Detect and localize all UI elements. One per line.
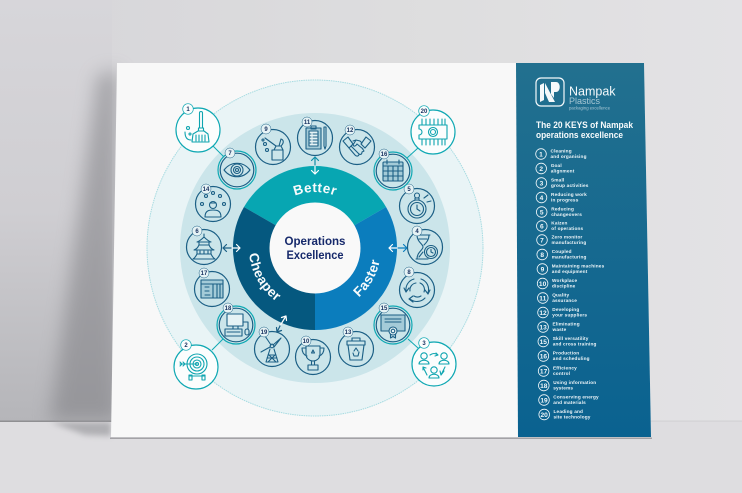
- key list: in progress: [551, 198, 579, 202]
- key 20: microchip: [411, 106, 455, 154]
- key 18: computer: 18: [225, 306, 232, 312]
- key list: Cleaning: [550, 148, 572, 154]
- key 10: trophy: [296, 336, 330, 374]
- key 12: handshake: 12: [347, 128, 354, 134]
- key list: 9: [541, 266, 545, 273]
- key list: Skill versatility: [553, 336, 589, 341]
- key 15: certificate: 15: [381, 306, 388, 312]
- key 5: stopwatch: 5: [407, 187, 411, 193]
- centre disc: [270, 202, 360, 294]
- key list: your suppliers: [552, 312, 587, 318]
- key 9: oil can: [256, 124, 290, 164]
- key list: group activities: [551, 183, 589, 188]
- key list: 3: [540, 180, 544, 187]
- key 17: control board: 17: [201, 271, 208, 277]
- key list: Small: [551, 178, 564, 182]
- connector lines to highlighted keys: [212, 146, 418, 350]
- key 3: group activities: [412, 338, 456, 386]
- key list: 12: [539, 310, 547, 317]
- label: Faster: Faster: [352, 260, 380, 297]
- key 10: trophy: 10: [303, 339, 310, 345]
- key list: 18: [540, 383, 548, 390]
- key 8: cycle arrows: [400, 267, 434, 308]
- key list: discipline: [552, 284, 576, 288]
- key 8: cycle arrows: 8: [407, 270, 411, 276]
- key 15: certificate: [374, 303, 412, 344]
- key list: 15: [540, 339, 547, 346]
- centre title: Operations: [284, 234, 346, 248]
- key list: 7: [540, 237, 544, 244]
- key 11: clipboard: 11: [304, 120, 311, 126]
- key list: site technology: [554, 414, 591, 420]
- key list: manufacturing: [552, 240, 586, 245]
- key 7: eye: 7: [228, 151, 232, 157]
- key list: control: [553, 371, 570, 376]
- key 17: control board: [194, 268, 230, 306]
- key 1: broom: [176, 104, 220, 152]
- key list: Reducing work: [551, 192, 587, 197]
- key list: 16: [540, 353, 547, 360]
- key 12: handshake: [340, 125, 374, 164]
- key list: and equipment: [552, 269, 588, 274]
- key list: Maintaining machines: [552, 264, 605, 268]
- logo: Nampak Plastics: Nampak: [569, 84, 616, 98]
- key list: manufacturing: [552, 254, 587, 260]
- segment: cheaper: [233, 207, 315, 330]
- key list: 1: [539, 151, 543, 158]
- heading: The 20 KEYS of Nampak: [536, 120, 634, 130]
- key 1: broom: 1: [186, 107, 190, 113]
- key list: alignment: [551, 168, 575, 174]
- key 14: person with network: [196, 184, 230, 222]
- diagram: concentric background circles: [147, 80, 483, 416]
- key list: 11: [539, 295, 547, 302]
- logo: Nampak Plastics: Plastics: [569, 96, 601, 106]
- key list: Developing: [552, 307, 579, 312]
- key list: and materials: [553, 400, 586, 405]
- key list: Production: [553, 350, 579, 356]
- key list: 6: [540, 223, 544, 230]
- key 6: pagoda: [186, 226, 222, 264]
- key list: 17: [540, 368, 548, 375]
- key 13: recycling bin: 13: [345, 330, 352, 336]
- key list: Eliminating: [552, 322, 580, 326]
- poster sheet: [110, 63, 652, 439]
- key list: Efficiency: [553, 366, 577, 370]
- segmented wheel: [233, 166, 397, 330]
- key list: Workplace: [552, 278, 577, 283]
- key list: assurance: [552, 298, 577, 303]
- key 4: hourglass: [408, 226, 442, 264]
- key list: and scheduling: [553, 356, 590, 361]
- key list: and organising: [550, 154, 587, 159]
- key list: of operations: [551, 226, 584, 231]
- key 7: eye: [218, 148, 256, 189]
- key list: 4: [540, 195, 544, 202]
- key list: Coupled: [552, 249, 572, 254]
- key list: 5: [540, 209, 544, 216]
- key list: systems: [553, 386, 573, 390]
- key list: 13: [539, 324, 547, 331]
- key 20: microchip: 20: [421, 109, 428, 115]
- key list: and cross training: [553, 342, 597, 346]
- key list: 8: [540, 252, 544, 259]
- key 5: stopwatch: [400, 184, 434, 224]
- key list: Conserving energy: [553, 394, 599, 400]
- centre title: Excellence: [286, 248, 344, 262]
- key list: Leading and: [554, 409, 583, 414]
- key list: 10: [539, 281, 547, 288]
- key 18: computer: [217, 303, 255, 344]
- key 6: pagoda: 6: [195, 229, 199, 235]
- heading: [536, 120, 634, 140]
- key 4: hourglass: 4: [415, 229, 419, 235]
- key list: changeovers: [551, 212, 582, 217]
- logo: Nampak Plastics: packaging excellence: [569, 106, 611, 110]
- key list: Using information: [553, 380, 596, 385]
- key 13: recycling bin: [338, 327, 374, 366]
- key list: 2: [539, 166, 543, 173]
- key 16: calendar: 16: [381, 152, 388, 158]
- key list: Kaizen: [551, 220, 568, 226]
- key list: Zero monitor: [552, 234, 583, 240]
- panel: key list sidebar: [516, 63, 651, 437]
- segment: better: [244, 166, 386, 248]
- heading: operations excellence: [536, 130, 623, 140]
- centre title: [284, 234, 346, 262]
- key 2: target: [174, 340, 218, 389]
- key 9: oil can: 9: [264, 127, 268, 133]
- key list: 20: [541, 412, 548, 419]
- logo: Nampak Plastics: [536, 78, 616, 110]
- key 16: calendar: [374, 149, 412, 190]
- segment: faster: [315, 207, 397, 330]
- label: Cheaper: Cheaper: [250, 253, 280, 300]
- key 11: clipboard: [298, 117, 332, 156]
- double arrows linking keys to wheel: [223, 157, 407, 332]
- label: Better: Better: [293, 183, 337, 196]
- key list: 19: [540, 397, 548, 404]
- key list: Quality: [552, 292, 570, 298]
- key list: Goal: [551, 163, 562, 168]
- key list: [536, 148, 605, 420]
- key 2: target: 2: [184, 343, 188, 349]
- key 19: windmill: 19: [261, 330, 268, 336]
- key 3: group activities: 3: [422, 341, 426, 347]
- key list: Reducing: [551, 206, 574, 212]
- key 14: person with network: 14: [203, 187, 210, 193]
- key list: waste: [552, 327, 567, 332]
- key 19: windmill: [254, 327, 290, 366]
